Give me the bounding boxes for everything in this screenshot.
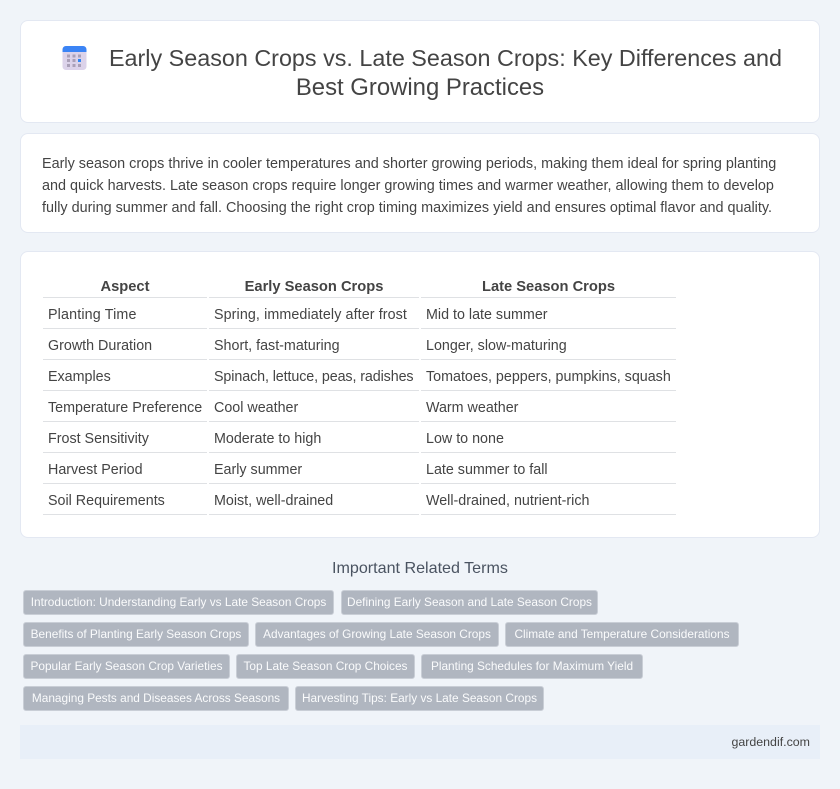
table header: Aspect bbox=[100, 279, 149, 295]
row: planting time: Spring, immediately after frost bbox=[214, 307, 407, 323]
related term tags: Managing Pests and Diseases Across Seasons bbox=[32, 691, 280, 705]
row: frost sensitivity: Moderate to high bbox=[214, 431, 321, 447]
footer source: gardendif.com bbox=[731, 735, 810, 749]
row: planting time: Planting Time bbox=[48, 307, 137, 323]
title bbox=[109, 45, 782, 101]
row: soil requirements: Soil Requirements bbox=[48, 493, 165, 509]
row: growth duration: Short, fast-maturing bbox=[214, 338, 340, 354]
row: growth duration: Longer, slow-maturing bbox=[426, 338, 567, 354]
intro text: Early season crops thrive in cooler temperatures and shorter growing periods, making them ideal for spring planting bbox=[42, 156, 776, 172]
intro text: fully during summer and fall. Choosing the right crop timing maximizes yield and ensures optimal flavor and quality. bbox=[42, 200, 772, 216]
related term tags: Advantages of Growing Late Season Crops bbox=[263, 627, 491, 641]
row: harvest period bbox=[48, 462, 548, 478]
row: temperature preference bbox=[48, 400, 518, 416]
related term tags: Benefits of Planting Early Season Crops bbox=[31, 627, 241, 641]
title: Best Growing Practices bbox=[296, 74, 544, 101]
row: soil requirements bbox=[48, 493, 589, 509]
table header: Early Season Crops bbox=[245, 279, 383, 295]
related term tags: Introduction: Understanding Early vs Late Season Crops bbox=[31, 595, 326, 609]
icon: calendar bbox=[62, 46, 86, 70]
row: examples: Spinach, lettuce, peas, radishes bbox=[214, 369, 413, 385]
header card bbox=[20, 20, 820, 123]
title: Early Season Crops vs. Late Season Crops: Key Differences and bbox=[109, 45, 782, 71]
intro text bbox=[42, 156, 776, 216]
row: examples: Examples bbox=[48, 369, 111, 385]
table header bbox=[100, 279, 615, 295]
related term tags: Top Late Season Crop Choices bbox=[244, 659, 407, 673]
related term tags: Planting Schedules for Maximum Yield bbox=[431, 659, 633, 673]
row: soil requirements: Moist, well-drained bbox=[214, 493, 333, 509]
row: temperature preference: Cool weather bbox=[214, 400, 298, 416]
table header: Late Season Crops bbox=[482, 279, 615, 295]
row: temperature preference: Warm weather bbox=[426, 400, 518, 416]
row: examples bbox=[48, 369, 671, 385]
row: growth duration bbox=[48, 338, 567, 354]
related term tags: Defining Early Season and Late Season Crops bbox=[347, 595, 592, 609]
intro text: and quick harvests. Late season crops require longer growing times and warmer weather, allowing them to develop bbox=[42, 178, 774, 194]
row: frost sensitivity: Low to none bbox=[426, 431, 504, 447]
row: harvest period: Early summer bbox=[214, 462, 302, 478]
row: temperature preference: Temperature Preference bbox=[48, 400, 202, 416]
footer bar bbox=[20, 725, 820, 759]
row: frost sensitivity: Frost Sensitivity bbox=[48, 431, 149, 447]
panel: introduction bbox=[20, 133, 820, 233]
row: harvest period: Harvest Period bbox=[48, 462, 143, 478]
row: examples: Tomatoes, peppers, pumpkins, squash bbox=[426, 369, 671, 385]
row: growth duration: Growth Duration bbox=[48, 338, 152, 354]
row: harvest period: Late summer to fall bbox=[426, 462, 548, 478]
related term tags: Harvesting Tips: Early vs Late Season Crops bbox=[302, 691, 537, 705]
related term tags bbox=[23, 590, 739, 711]
related term tags: Popular Early Season Crop Varieties bbox=[30, 659, 222, 673]
row: planting time bbox=[48, 307, 548, 323]
related term tags: Climate and Temperature Considerations bbox=[514, 627, 730, 641]
panel: comparison table bbox=[20, 251, 820, 538]
row: frost sensitivity bbox=[48, 431, 504, 447]
row: soil requirements: Well-drained, nutrient-rich bbox=[426, 493, 589, 509]
row: planting time: Mid to late summer bbox=[426, 307, 548, 323]
heading: related terms: Important Related Terms bbox=[332, 558, 508, 576]
